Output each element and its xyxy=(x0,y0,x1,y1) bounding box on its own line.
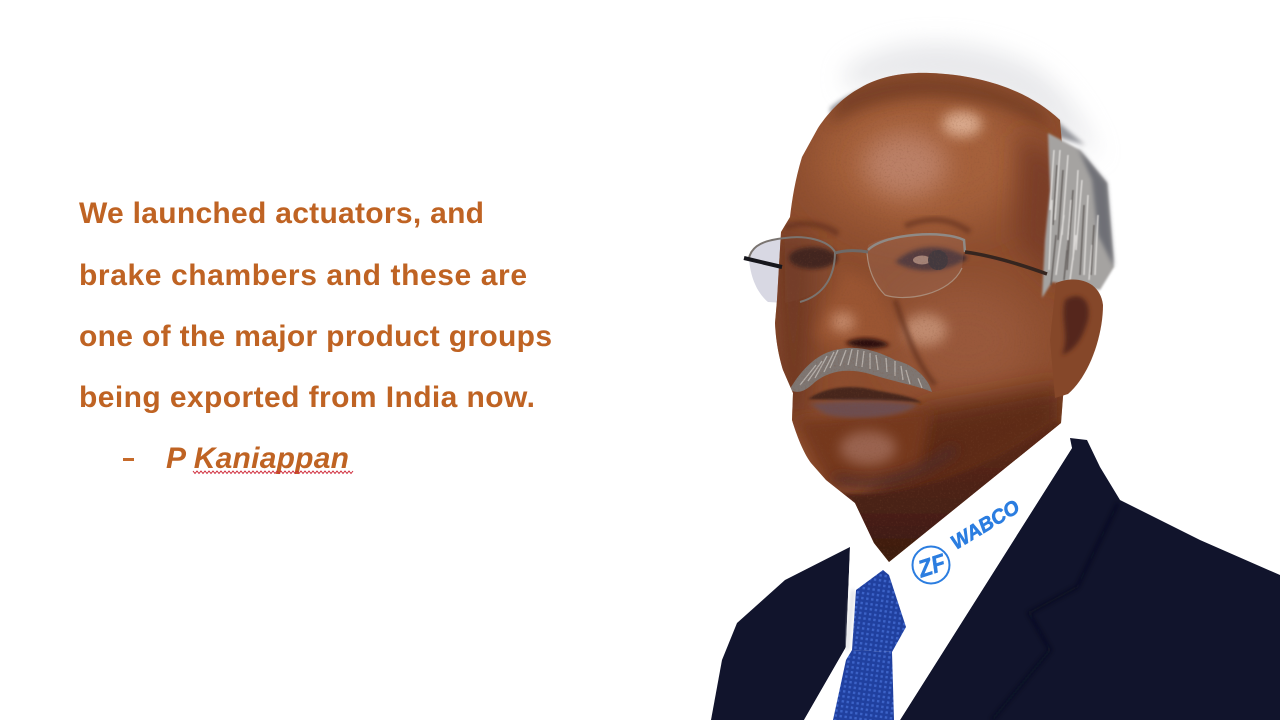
quote line 2: brake chambers and these are xyxy=(79,259,527,292)
lower face xyxy=(795,410,930,490)
hair xyxy=(1042,133,1114,298)
nostril xyxy=(845,338,890,349)
scalp top shade xyxy=(830,76,1050,130)
moustache strands xyxy=(800,349,922,388)
head rim shadow xyxy=(830,79,1085,145)
left lens tint xyxy=(788,246,834,270)
ear shape xyxy=(1050,279,1103,398)
attribution xyxy=(123,442,353,475)
temple arm xyxy=(965,252,1047,274)
ear inner xyxy=(1062,296,1089,355)
right lens tint xyxy=(868,235,965,298)
skin texture xyxy=(793,108,1055,557)
jacket left side xyxy=(711,547,850,720)
quote line 4: being exported from India now. xyxy=(79,381,535,414)
left face shade xyxy=(770,230,815,420)
nose xyxy=(816,277,890,344)
left temple stub xyxy=(744,258,782,267)
chin fold xyxy=(835,448,955,483)
quote line 1: We launched actuators, and xyxy=(79,197,484,230)
attribution name: P Kaniappan xyxy=(166,442,349,475)
portrait xyxy=(711,43,1280,720)
jaw shade xyxy=(860,385,1065,560)
glasses xyxy=(744,234,1047,302)
bridge xyxy=(835,251,868,253)
left lens frame xyxy=(749,237,835,302)
neck xyxy=(840,422,1061,562)
right iris xyxy=(928,250,948,270)
right lens frame xyxy=(868,234,965,252)
right eye xyxy=(895,247,968,271)
hair light streaks xyxy=(1049,150,1098,285)
hair halo xyxy=(845,43,1100,160)
ZF ring xyxy=(912,546,950,584)
tie xyxy=(833,570,906,720)
glasses outer lens xyxy=(749,238,785,303)
jacket xyxy=(711,438,1280,720)
spellcheck squiggle xyxy=(193,471,353,474)
right lens lower rim xyxy=(867,252,962,298)
nose fold xyxy=(895,300,935,385)
right eye white xyxy=(913,256,928,264)
skin base xyxy=(775,72,1064,562)
forehead highlight xyxy=(863,133,947,197)
brow shine xyxy=(942,111,982,137)
ear xyxy=(1050,279,1103,398)
tie knot xyxy=(852,570,906,652)
shirt xyxy=(804,423,1072,720)
forehead tone xyxy=(815,90,1035,230)
cheek highlight xyxy=(903,314,947,346)
ZF letters: ZF xyxy=(914,549,950,584)
dark strands xyxy=(1051,165,1094,285)
lower lip xyxy=(810,401,918,418)
collar logo: WABCO: WABCO xyxy=(947,496,1024,554)
collar logo: ZF xyxy=(912,546,950,584)
hair back shadow xyxy=(1078,148,1114,267)
left eye xyxy=(789,247,837,269)
brows xyxy=(785,220,970,234)
face xyxy=(775,72,1064,562)
nose tip highlight xyxy=(831,312,855,332)
collar shadow xyxy=(847,590,853,650)
lapel line xyxy=(992,503,1118,720)
jacket right side xyxy=(900,438,1280,720)
cheek xyxy=(905,292,1026,388)
light strands xyxy=(1049,150,1098,280)
temple shade xyxy=(1008,134,1050,270)
quote line 3: one of the major product groups xyxy=(79,320,552,353)
quote text block xyxy=(79,197,552,414)
upper lip xyxy=(808,387,922,403)
moustache xyxy=(791,348,932,392)
hair mass xyxy=(1042,133,1114,298)
attribution dash xyxy=(123,458,134,461)
chin xyxy=(840,431,896,465)
tie blade xyxy=(833,650,894,720)
